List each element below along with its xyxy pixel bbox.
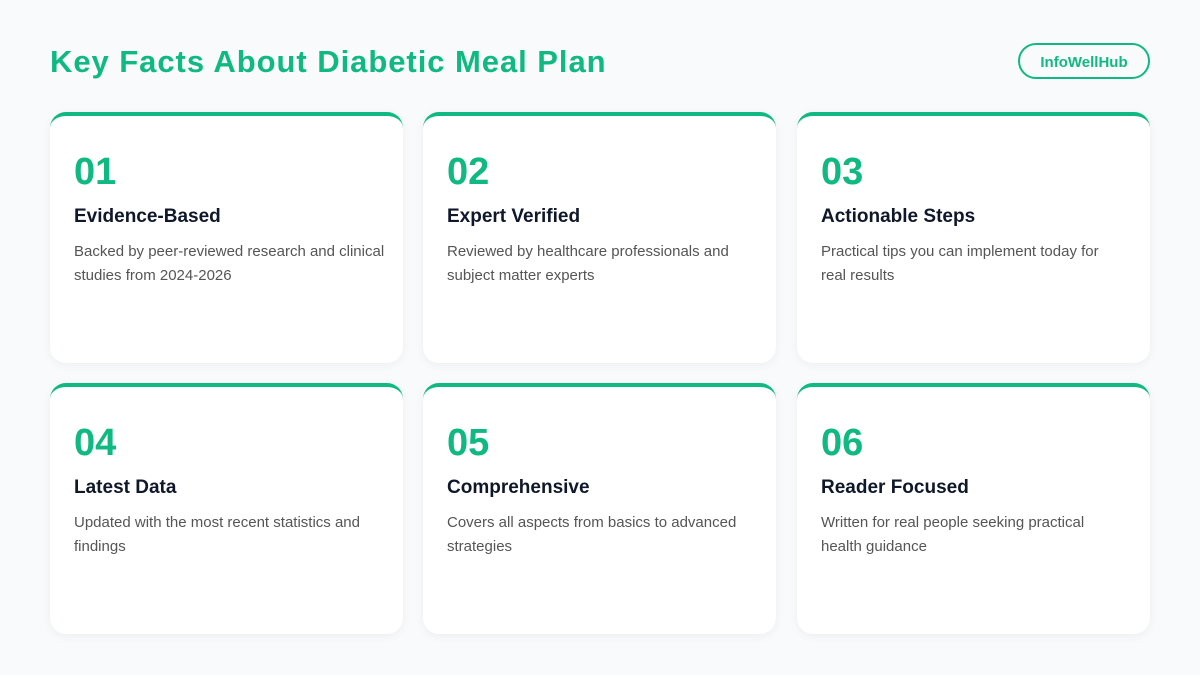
badge: brand: InfoWellHub — [1040, 54, 1128, 71]
text: findings — [74, 538, 126, 555]
text: Written for real people seeking practical — [821, 514, 1084, 531]
number: 03 — [821, 151, 863, 193]
text: health guidance — [821, 538, 927, 555]
text: subject matter experts — [447, 267, 595, 284]
panel: 06 — [797, 383, 1150, 634]
text: Practical tips you can implement today for — [821, 243, 1099, 260]
text: Backed by peer-reviewed research and clinical — [74, 243, 384, 260]
heading: Comprehensive — [447, 477, 590, 498]
number: 02 — [447, 151, 489, 193]
text — [821, 514, 1084, 555]
text: real results — [821, 267, 894, 284]
text: strategies — [447, 538, 512, 555]
panel: 05 — [423, 383, 776, 634]
text — [447, 514, 736, 555]
text — [74, 514, 360, 555]
number: 04 — [74, 422, 116, 464]
panel: 04 — [50, 383, 403, 634]
panel: 01 — [50, 112, 403, 363]
text: Reviewed by healthcare professionals and — [447, 243, 729, 260]
text — [821, 243, 1099, 284]
title: Key Facts About Diabetic Meal Plan — [50, 44, 607, 79]
heading: Evidence-Based — [74, 206, 221, 227]
text: Updated with the most recent statistics and — [74, 514, 360, 531]
number: 01 — [74, 151, 116, 193]
text — [447, 243, 729, 284]
text — [74, 243, 384, 284]
heading: Reader Focused — [821, 477, 969, 498]
number: 06 — [821, 422, 863, 464]
text: Covers all aspects from basics to advanced — [447, 514, 736, 531]
badge: brand — [1018, 43, 1150, 79]
heading: Expert Verified — [447, 206, 580, 227]
heading: Latest Data — [74, 477, 176, 498]
panel: 03 — [797, 112, 1150, 363]
panel: 02 — [423, 112, 776, 363]
heading: Actionable Steps — [821, 206, 975, 227]
text: studies from 2024-2026 — [74, 267, 232, 284]
number: 05 — [447, 422, 489, 464]
